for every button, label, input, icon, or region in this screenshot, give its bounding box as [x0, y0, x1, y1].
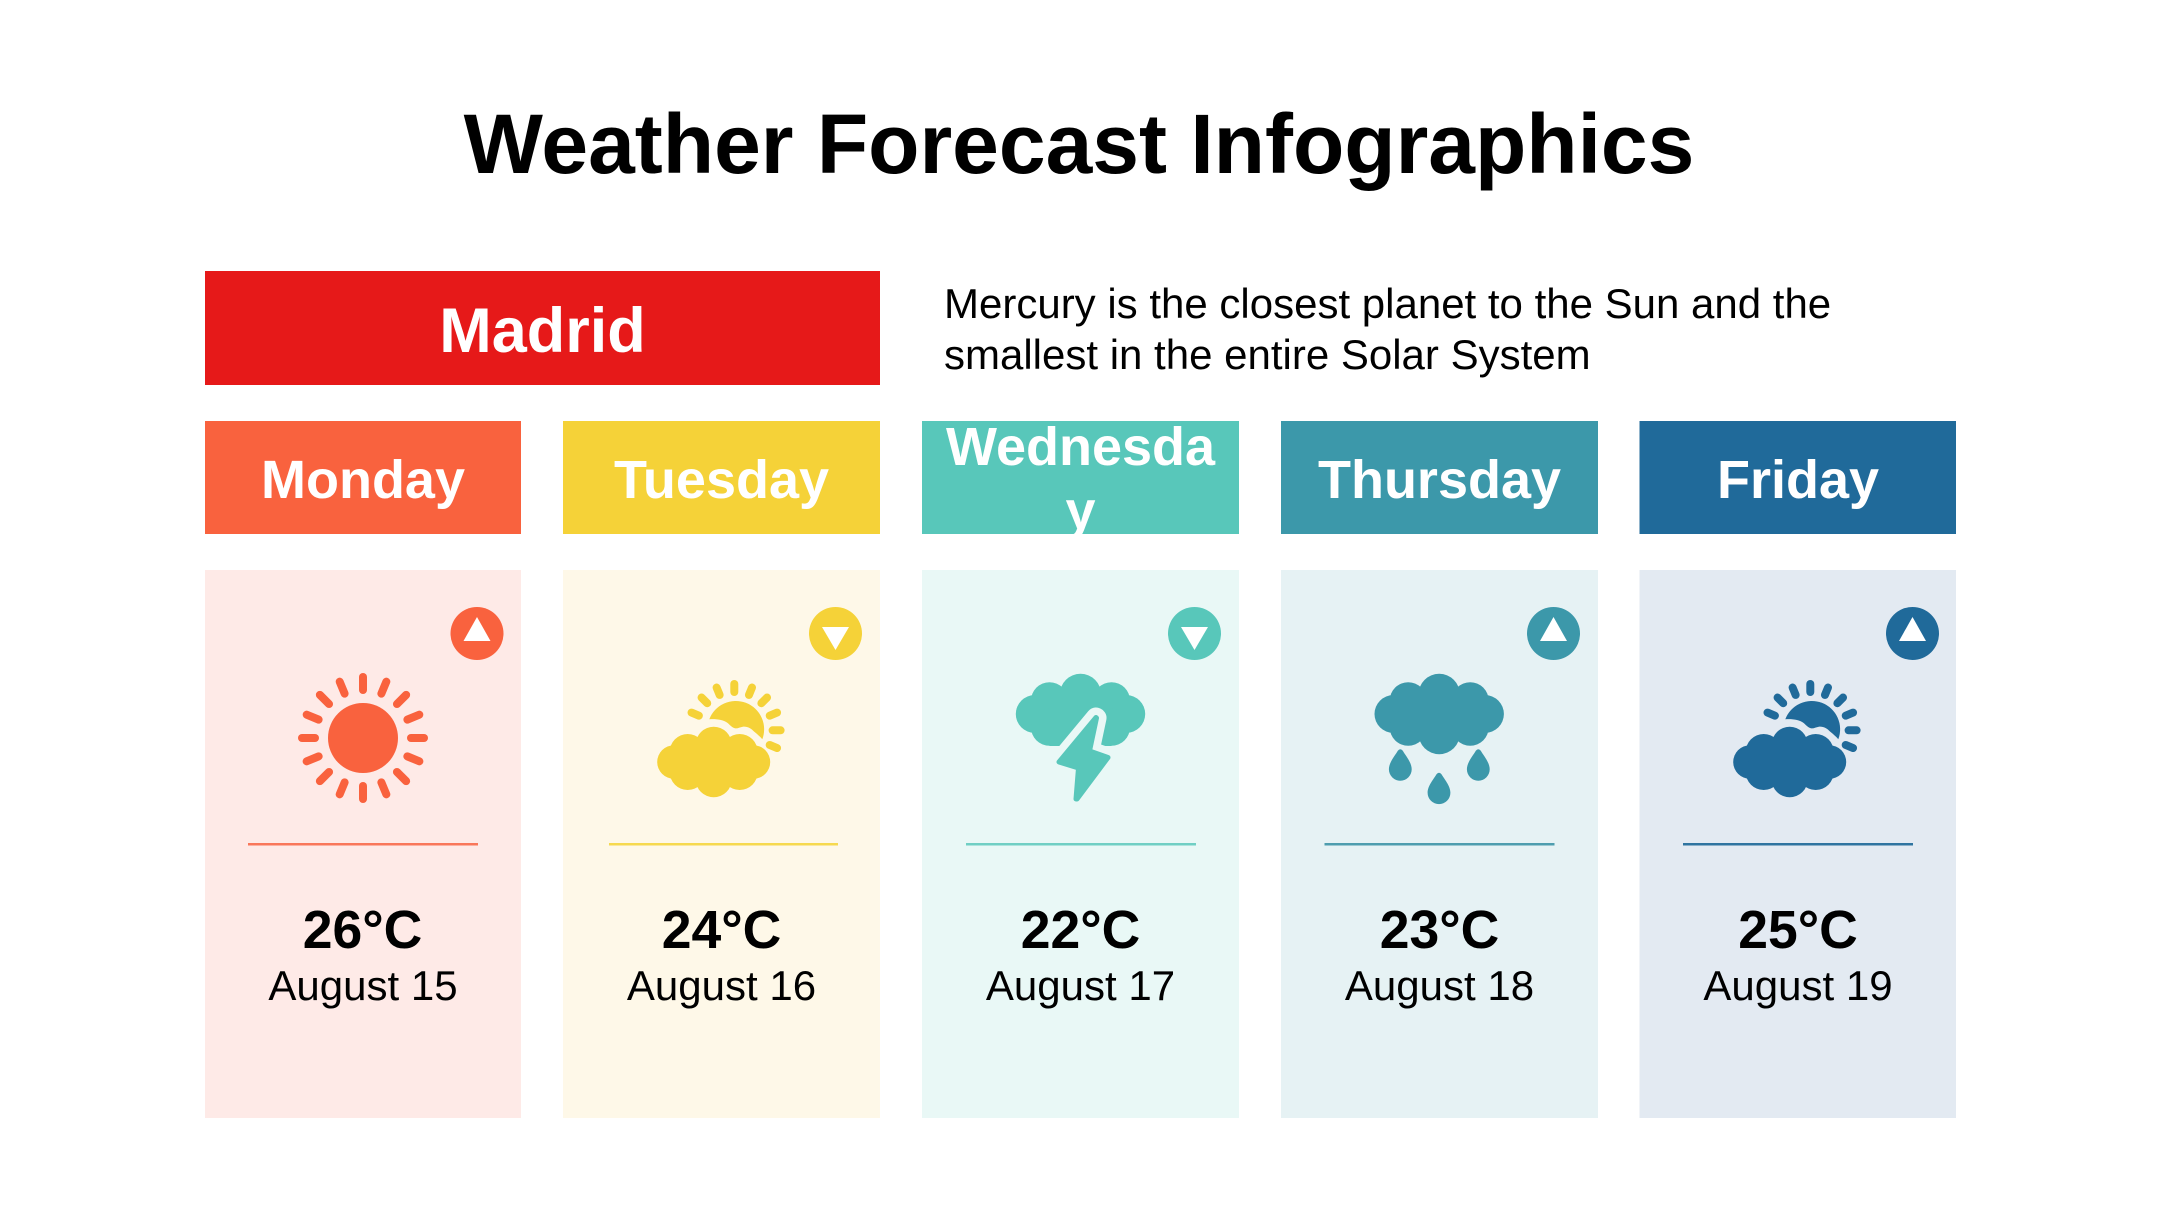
date: Monday: August 15 — [268, 962, 458, 1009]
trend badge: up — [1527, 607, 1580, 660]
temperature: Tuesday: 24°C — [662, 901, 781, 960]
panel: Wednesday — [922, 417, 1239, 1118]
panel: Tuesday — [563, 421, 880, 1118]
icon: thunderstorm — [1016, 674, 1145, 799]
icon: sun behind cloud — [657, 684, 781, 797]
card background: Tuesday — [563, 570, 880, 1118]
date: Tuesday: August 16 — [627, 962, 816, 1009]
card background: Friday — [1640, 570, 1956, 1118]
date: Wednesday: August 17 — [986, 962, 1175, 1009]
date: Thursday: August 18 — [1345, 962, 1534, 1009]
card background: Wednesday — [922, 570, 1239, 1118]
day header: Wednesday — [922, 417, 1239, 541]
city banner: Madrid — [205, 271, 880, 385]
trend badge: down — [1168, 607, 1221, 660]
day header: Friday: Friday — [1717, 450, 1879, 510]
icon: sun behind cloud — [1733, 684, 1857, 797]
day header: Wednesday: Wednesda — [946, 417, 1216, 477]
day header: Monday: Monday — [261, 450, 465, 510]
temperature: Wednesday: 22°C — [1021, 901, 1140, 960]
icon: rain cloud — [1374, 674, 1504, 804]
day header: Thursday: Thursday — [1318, 450, 1561, 510]
day header: Friday — [1640, 421, 1956, 534]
panel: Thursday — [1281, 421, 1598, 1118]
city banner: Madrid: Madrid — [439, 296, 646, 366]
temperature: Monday: 26°C — [303, 901, 422, 960]
description text: Mercury is the closest planet to the Sun and the — [944, 280, 1831, 327]
day header: Wednesday: y — [1065, 481, 1096, 541]
title: Weather Forecast Infographics — [464, 97, 1694, 191]
day header: Tuesday — [563, 421, 880, 534]
trend badge: down — [809, 607, 862, 660]
trend badge: up — [1886, 607, 1939, 660]
temperature: Thursday: 23°C — [1380, 901, 1499, 960]
icon: sun — [302, 677, 424, 799]
day header: Tuesday: Tuesday — [614, 450, 829, 510]
card background: Thursday — [1281, 570, 1598, 1118]
card background: Monday — [205, 570, 521, 1118]
description text: smallest in the entire Solar System — [944, 331, 1591, 378]
trend badge: up — [450, 607, 504, 660]
day header: Monday — [205, 421, 521, 534]
date: Friday: August 19 — [1703, 962, 1893, 1009]
temperature: Friday: 25°C — [1738, 901, 1858, 960]
panel: Monday — [205, 421, 521, 1118]
panel: Friday — [1640, 421, 1956, 1118]
day header: Thursday — [1281, 421, 1598, 534]
